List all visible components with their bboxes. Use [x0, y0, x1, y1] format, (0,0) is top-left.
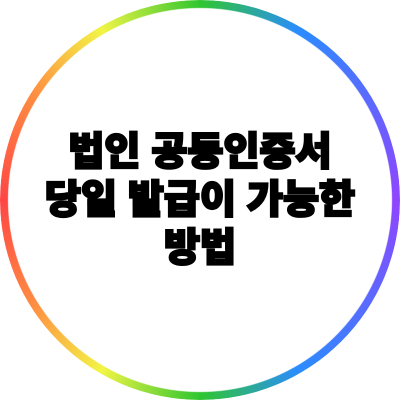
- title: [45, 130, 356, 270]
- title: 법인 공동인증서: [68, 131, 332, 174]
- title: 당일 발급이 가능한: [45, 179, 355, 222]
- title: 방법: [164, 227, 236, 270]
